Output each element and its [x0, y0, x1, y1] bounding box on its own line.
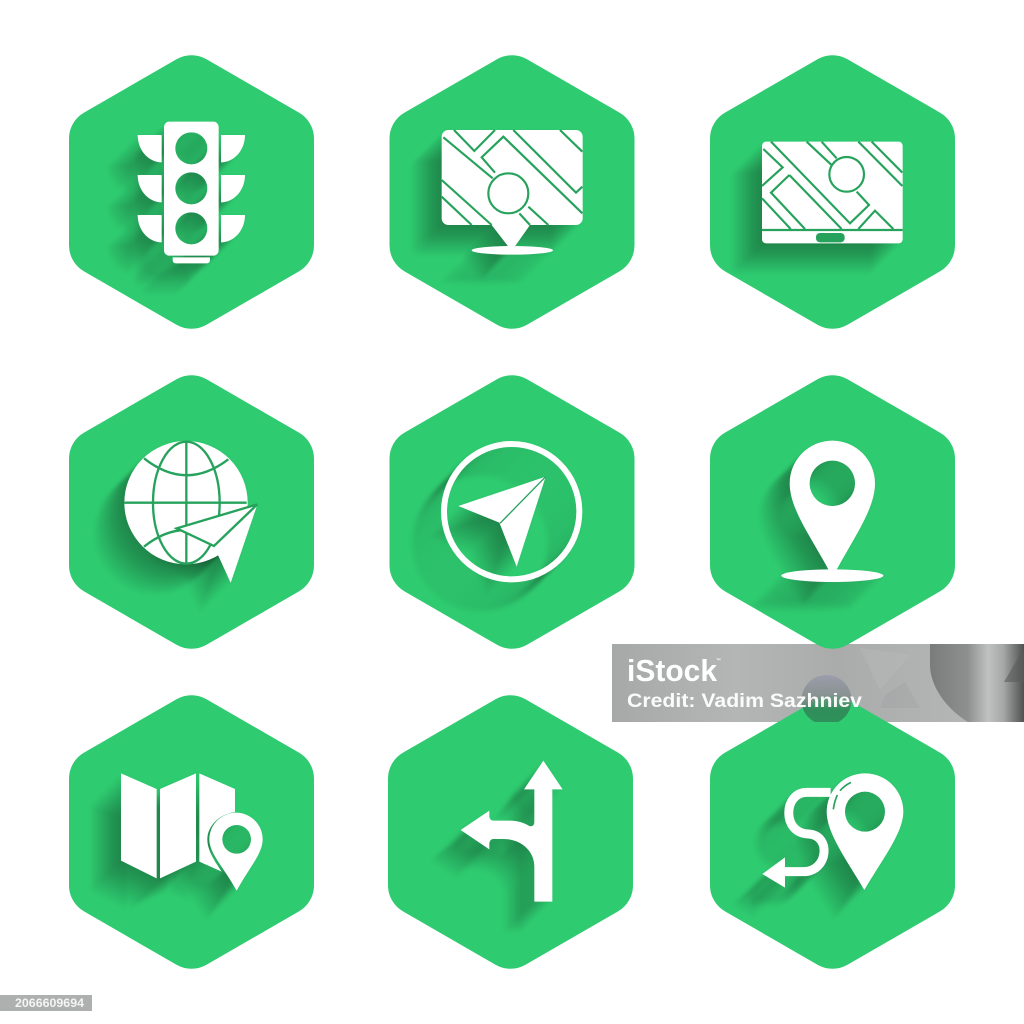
icon: traffic light [138, 122, 245, 263]
icon: globe with paper plane [124, 441, 257, 583]
icon: fork road arrows [461, 761, 563, 902]
image id label: 2066609694 [15, 996, 84, 1010]
icon: map bubble with location pointer [442, 130, 583, 255]
panel: route to pin hexagon [710, 695, 955, 969]
panel: tablet map hexagon [710, 55, 955, 329]
panel: globe and paper plane hexagon [69, 375, 314, 649]
panel: location pin hexagon [710, 375, 955, 649]
panel: road fork arrow hexagon [388, 695, 633, 969]
icon: winding route and pin [762, 773, 903, 890]
panel: map speech bubble hexagon [390, 55, 634, 329]
icon: navigation arrow in circle [441, 441, 582, 582]
watermark text: Credit: Vadim Sazhniev [627, 691, 862, 712]
watermark banner background [612, 644, 1024, 722]
watermark sphere overlay [802, 675, 852, 725]
icon: tablet with map [762, 142, 903, 243]
icon: location pin on ground [781, 441, 883, 582]
panel: compass navigation hexagon [390, 375, 634, 649]
icon: folded map with pin [121, 773, 263, 891]
watermark text [627, 653, 862, 712]
image id label [0, 995, 92, 1011]
panel: traffic light hexagon [69, 55, 314, 329]
panel: folded map hexagon [69, 695, 314, 969]
watermark text: ™ [716, 658, 721, 664]
watermark text: iStock [627, 653, 718, 688]
